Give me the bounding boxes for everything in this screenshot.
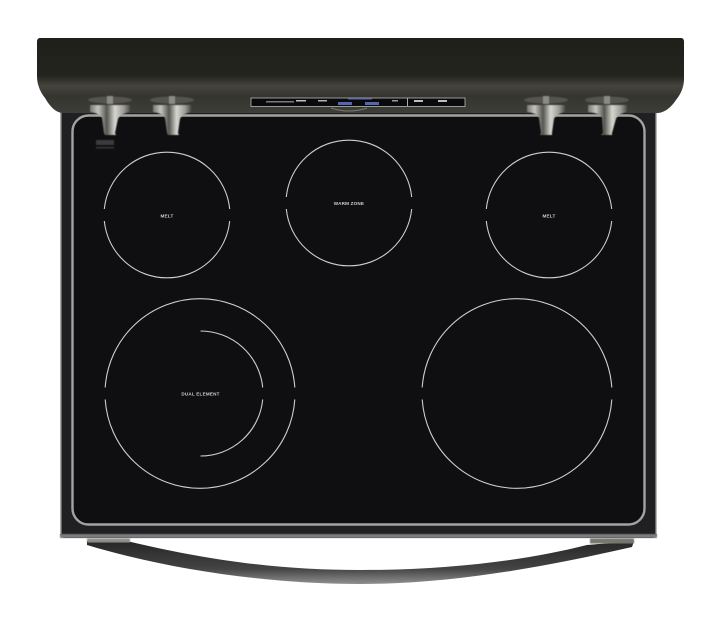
burner: top center, warm zone xyxy=(286,140,412,266)
handle mount left xyxy=(87,538,130,542)
burner: bottom left, dual element xyxy=(105,299,295,488)
burner: bottom right xyxy=(422,299,612,488)
burner: top right, melt: MELT xyxy=(543,214,555,218)
burner: bottom left, dual element: DUAL ELEMENT xyxy=(181,392,220,396)
oven handle xyxy=(87,538,634,584)
inner element arc xyxy=(200,331,263,456)
knob 2 xyxy=(150,96,194,135)
handle mount right xyxy=(590,538,634,544)
model badge xyxy=(96,140,114,148)
range body xyxy=(60,100,657,538)
knob 4 xyxy=(585,96,629,135)
control panel lid xyxy=(37,38,684,113)
burner: top center, warm zone: WARM ZONE xyxy=(334,201,364,206)
knob 1 xyxy=(88,96,132,135)
glass cooktop xyxy=(72,116,644,524)
display panel xyxy=(251,98,465,111)
burner: top left, melt xyxy=(104,152,230,278)
burner: top right, melt xyxy=(486,152,612,278)
knob 3 xyxy=(524,96,568,135)
burner: top left, melt: MELT xyxy=(161,214,173,218)
